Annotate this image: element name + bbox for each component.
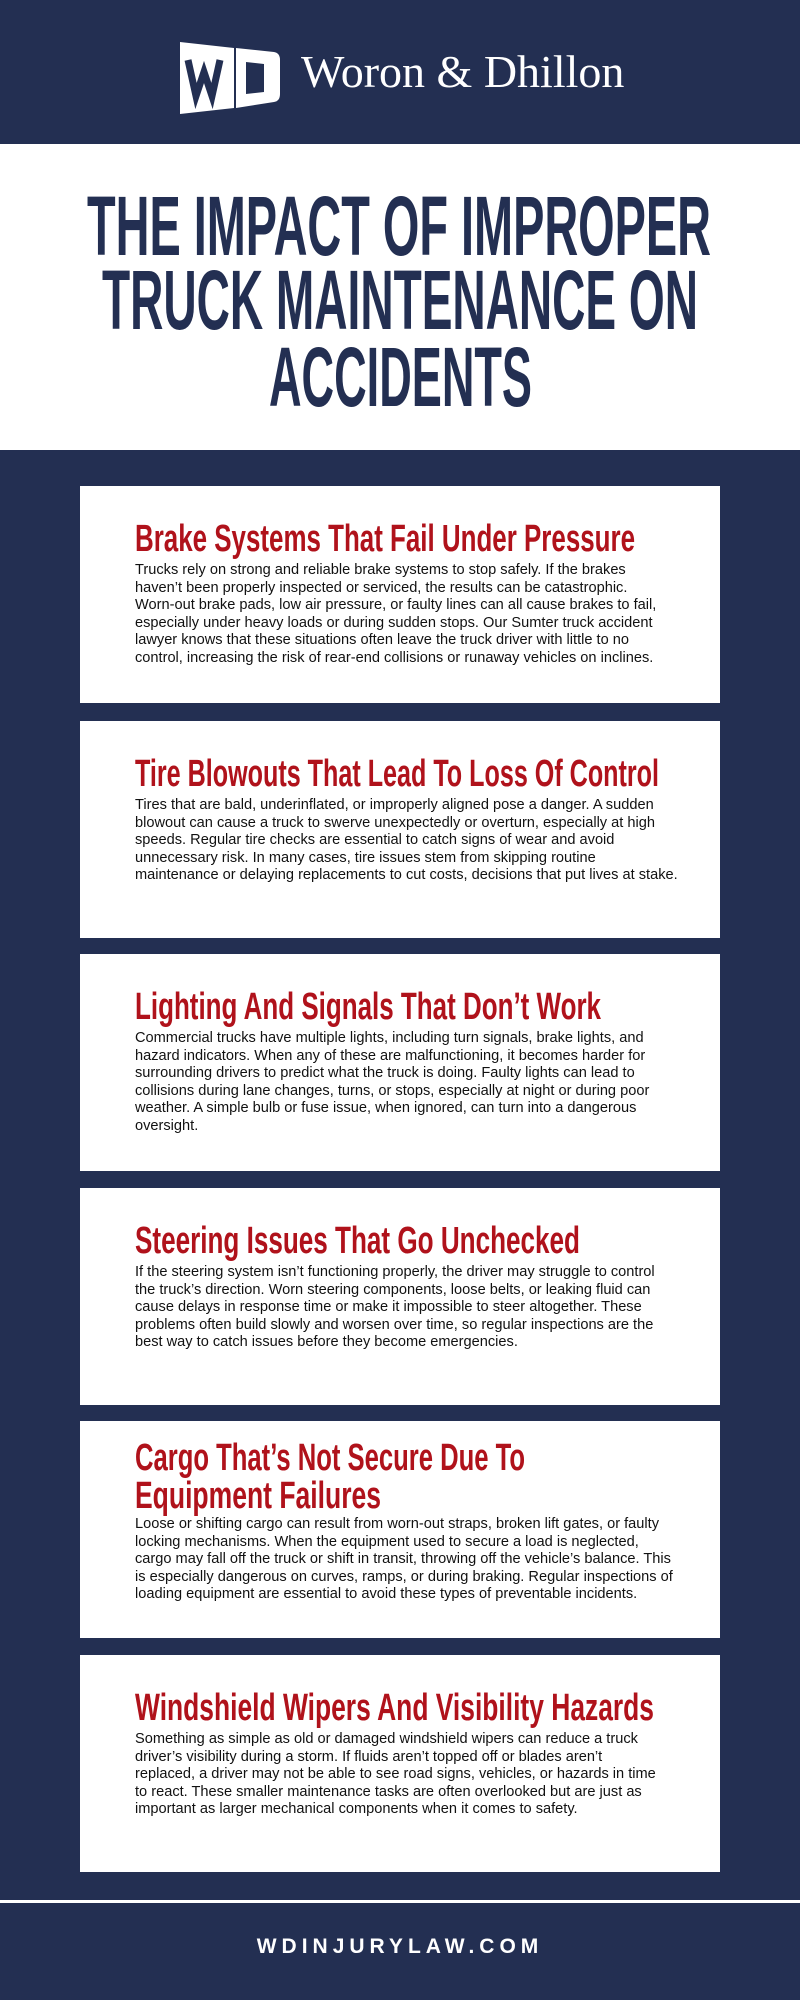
icon: WD mark (180, 42, 280, 114)
text: tires: blowout can cause a truck to swerve unexpectedly or overturn, especially at high (135, 814, 655, 830)
panel: steering (80, 1188, 720, 1405)
text: cargo: Loose or shifting cargo can result from worn-out straps, broken lift gates, or faulty (135, 1516, 659, 1532)
panel: brake systems (80, 486, 720, 703)
text: windshield (135, 1731, 656, 1817)
text: lighting: collisions during lane changes, turns, or stops, especially at night or during poor (135, 1082, 649, 1098)
brand name: Woron & Dhillon (301, 46, 624, 97)
text: windshield: Something as simple as old or damaged windshield wipers can reduce a truck (135, 1731, 638, 1747)
text: brake: Trucks rely on strong and reliable brake systems to stop safely. If the brakes (135, 562, 626, 578)
panel: tire blowouts (80, 721, 720, 938)
text: windshield: important as larger mechanical components when it comes to safety. (135, 1801, 578, 1817)
text: brake: Worn-out brake pads, low air pressure, or faulty lines can all cause brakes to fail, (135, 597, 656, 613)
text: steering: the truck’s direction. Worn steering components, loose belts, or leaking fluid can (135, 1282, 650, 1298)
title: ACCIDENTS (269, 330, 532, 424)
text: lighting: surrounding drivers to predict what the truck is doing. Faulty lights can lead to (135, 1065, 635, 1081)
text: lighting: Commercial trucks have multiple lights, including turn signals, brake lights, and (135, 1030, 644, 1046)
title (87, 179, 711, 424)
text: cargo (135, 1516, 673, 1602)
text: steering: problems often build slowly and worsen over time, so regular inspections are the (135, 1316, 653, 1332)
text: windshield: replaced, a driver may not be able to see road signs, vehicles, or hazards in time (135, 1766, 656, 1782)
heading: cargo: Equipment Failures (135, 1475, 381, 1516)
text: lighting: hazard indicators. When any of these are malfunctioning, it becomes harder for (135, 1048, 645, 1064)
text: tires: maintenance or delaying replacements to cut costs, decisions that put lives at stake. (135, 867, 678, 883)
text: lighting: weather. A simple bulb or fuse issue, when ignored, can turn into a dangerous (135, 1100, 636, 1116)
text: steering (135, 1264, 655, 1350)
text: steering: If the steering system isn’t functioning properly, the driver may struggle to control (135, 1264, 655, 1280)
heading: cargo (135, 1437, 525, 1516)
text: cargo: loading equipment are essential to avoid these types of preventable incidents. (135, 1586, 637, 1602)
text: tires: Tires that are bald, underinflated, or improperly aligned pose a danger. A sudden (135, 797, 654, 813)
panel: lighting (80, 954, 720, 1171)
text: windshield: to react. These smaller maintenance tasks are often overlooked but are just as (135, 1784, 642, 1800)
text: windshield: driver’s visibility during a storm. If fluids aren’t topped off or blades aren’t (135, 1748, 602, 1764)
text: brake: lawyer knows that these situations often leave the truck driver with little to no (135, 632, 629, 648)
text: cargo: locking mechanisms. When the equipment used to secure a load is neglected, (135, 1534, 639, 1550)
text: cargo: cargo may fall off the truck or shift in transit, throwing off the vehicle’s balance. This (135, 1551, 671, 1567)
text: cargo: is especially dangerous on curves, ramps, or during braking. Regular inspections of (135, 1568, 673, 1584)
text: steering: cause delays in response time or make it impossible to steer altogether. These (135, 1299, 642, 1315)
text: brake: control, increasing the risk of rear-end collisions or runaway vehicles on inclines. (135, 650, 653, 666)
heading: cargo: Cargo That’s Not Secure Due To (135, 1437, 525, 1479)
text: brake: haven’t been properly inspected or serviced, the results can be catastrophic. (135, 580, 627, 596)
text: lighting: oversight. (135, 1118, 198, 1134)
panel: cargo (80, 1421, 720, 1638)
text: brake: especially under heavy loads or during sudden stops. Our Sumter truck accident (135, 614, 653, 630)
text: brake (135, 562, 656, 666)
panel: windshield (80, 1655, 720, 1872)
text: tires (135, 797, 678, 883)
logo (180, 42, 624, 114)
text: steering: best way to catch issues before they become emergencies. (135, 1334, 518, 1350)
text: tires: speeds. Regular tire checks are essential to catch signs of wear and avoid (135, 832, 614, 848)
header (0, 0, 800, 144)
text: tires: unnecessary risk. In many cases, tire issues stem from skipping routine (135, 850, 596, 866)
footer url: WDINJURYLAW.COM (257, 1935, 543, 1958)
title block (0, 144, 800, 450)
text: lighting (135, 1030, 650, 1134)
